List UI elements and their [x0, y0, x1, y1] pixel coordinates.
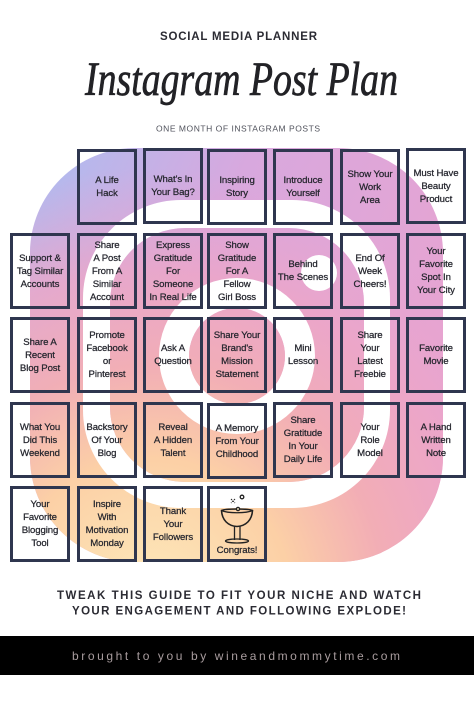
post: What's In Your Bag?: [143, 148, 203, 224]
post: Favorite Movie: Favorite: [419, 343, 453, 354]
post: End Of Week Cheers!: End Of: [355, 252, 385, 264]
post: Must Have Beauty Product: Beauty: [421, 180, 451, 192]
post: Thank Your Followers: Your: [164, 518, 182, 530]
post: Must Have Beauty Product: [406, 148, 466, 224]
post: Share Your Brand's Mission Statement: Statement: [216, 369, 258, 380]
post: Backstory Of Your Blog: Of Your: [91, 434, 123, 446]
post: Support & Tag Similar Accounts: Support &: [19, 252, 61, 264]
post: Inspiring Story: Story: [226, 188, 248, 199]
post: Support & Tag Similar Accounts: [10, 233, 70, 309]
post: A Memory From Your Childhood: Childhood: [216, 448, 258, 460]
post: Share A Post From A Similar Account: From A: [92, 266, 122, 276]
post: A Memory From Your Childhood: From Your: [215, 436, 259, 446]
post: Show Your Work Area: Area: [360, 194, 380, 206]
post: Your Favorite Spot In Your City: [406, 233, 466, 309]
post: Promote Facebook or Pinterest: Promote: [89, 330, 125, 341]
post: Backstory Of Your Blog: [77, 402, 137, 478]
footer band: [0, 636, 474, 675]
post: Share A Post From A Similar Account: [77, 233, 137, 309]
post: What's In Your Bag?: Your Bag?: [151, 187, 195, 198]
post: What You Did This Weekend: Did This: [23, 434, 57, 446]
post: Reveal A Hidden Talent: Reveal: [158, 422, 188, 432]
post: Express Gratitude For Someone In Real Life: Express: [156, 240, 190, 250]
post: Show Gratitude For A Fellow Girl Boss: Fellow: [223, 278, 251, 290]
post: Your Favorite Blogging Tool: Your: [30, 499, 49, 510]
post: Your Role Model: Role: [360, 434, 380, 446]
post: Support & Tag Similar Accounts: Accounts: [21, 278, 59, 290]
post: Show Your Work Area: Work: [359, 182, 381, 192]
post: Share A Recent Blog Post: Recent: [25, 350, 55, 360]
post: Behind The Scenes: The Scenes: [278, 272, 328, 283]
post: Share Your Latest Freebie: Latest: [357, 356, 383, 367]
post: Inspire With Motivation Monday: Monday: [90, 538, 124, 549]
post: Inspire With Motivation Monday: Inspire: [93, 499, 121, 510]
post: Your Favorite Blogging Tool: Blogging: [22, 525, 58, 536]
post: Share A Post From A Similar Account: Account: [90, 292, 124, 302]
post: Inspire With Motivation Monday: Motivation: [86, 525, 128, 536]
post: Share Gratitude In Your Daily Life: [273, 402, 333, 478]
post: Congrats!: Congrats!: [217, 545, 257, 556]
post: Promote Facebook or Pinterest: Pinterest: [89, 369, 125, 380]
post: Mini Lesson: Lesson: [288, 356, 318, 367]
post: A Memory From Your Childhood: A Memory: [216, 422, 258, 434]
post: A Hand Written Note: Note: [426, 448, 446, 458]
post: Inspire With Motivation Monday: With: [98, 512, 116, 523]
post: Share Your Brand's Mission Statement: Mission: [221, 356, 253, 367]
post: Backstory Of Your Blog: Blog: [98, 448, 116, 458]
post: Promote Facebook or Pinterest: Facebook: [86, 343, 128, 354]
call to action text: [57, 590, 421, 618]
title: Instagram Post Plan: Instagram Post Plan: [84, 53, 398, 106]
post: Reveal A Hidden Talent: [143, 402, 203, 478]
footer band: brought to you by wineandmommytime.com: [72, 649, 400, 663]
post: End Of Week Cheers!: Cheers!: [354, 278, 386, 290]
post: Share A Recent Blog Post: Blog Post: [20, 362, 60, 374]
post: Must Have Beauty Product: Must Have: [414, 168, 458, 178]
post: Share Your Brand's Mission Statement: Share Your: [214, 330, 260, 341]
post: Show Gratitude For A Fellow Girl Boss: Gratitude: [218, 252, 256, 264]
post: Show Gratitude For A Fellow Girl Boss: For A: [226, 266, 248, 276]
post: Support & Tag Similar Accounts: Tag Similar: [17, 266, 63, 276]
post: Share A Post From A Similar Account: Share: [94, 240, 120, 250]
post: What You Did This Weekend: Weekend: [20, 448, 60, 458]
post: Share A Post From A Similar Account: Similar: [93, 278, 121, 290]
heading: social media planner: SOCIAL MEDIA PLANNER: [160, 31, 318, 43]
post: Mini Lesson: Mini: [294, 343, 312, 354]
post: Thank Your Followers: Followers: [153, 532, 193, 542]
post: Mini Lesson: [273, 317, 333, 393]
post: Reveal A Hidden Talent: A Hidden: [154, 434, 192, 446]
post: Behind The Scenes: [273, 233, 333, 309]
post: Your Favorite Spot In Your City: Spot In: [421, 272, 451, 283]
post: Introduce Yourself: Introduce: [283, 175, 323, 186]
post: A Life Hack: A Life: [95, 175, 119, 186]
post: Share Gratitude In Your Daily Life: Share: [290, 415, 316, 426]
post: Share Your Latest Freebie: Your: [360, 343, 379, 354]
post: Share A Post From A Similar Account: A Post: [93, 252, 121, 264]
post: Share A Recent Blog Post: Share A: [23, 336, 57, 348]
post: Express Gratitude For Someone In Real Life: Someone: [153, 278, 193, 290]
post: Share Your Latest Freebie: Share: [357, 330, 383, 341]
post: A Memory From Your Childhood: [207, 403, 267, 479]
post: A Life Hack: [77, 149, 137, 225]
post: A Life Hack: Hack: [96, 188, 118, 199]
post: Thank Your Followers: [143, 486, 203, 562]
post: Express Gratitude For Someone In Real Life: [143, 233, 203, 309]
post: Your Role Model: [340, 402, 400, 478]
post: Your Favorite Spot In Your City: Your City: [417, 285, 455, 296]
post: A Hand Written Note: [406, 402, 466, 478]
post: Express Gratitude For Someone In Real Life: In Real Life: [149, 292, 197, 302]
post: Congrats!: [207, 486, 267, 562]
post: A Hand Written Note: Written: [421, 434, 451, 446]
post: End Of Week Cheers!: Week: [358, 266, 382, 276]
post: Show Gratitude For A Fellow Girl Boss: [207, 233, 267, 309]
post: What's In Your Bag?: What's In: [154, 174, 192, 185]
post: Share Your Brand's Mission Statement: [207, 317, 267, 393]
post: What You Did This Weekend: What You: [20, 422, 60, 432]
post: Share Your Latest Freebie: Freebie: [354, 369, 386, 380]
post: Ask A Question: Question: [154, 356, 192, 367]
post: Favorite Movie: [406, 317, 466, 393]
icon: Instagram logo: [30, 148, 443, 562]
post: Express Gratitude For Someone In Real Life: For: [166, 266, 180, 276]
post: Share Gratitude In Your Daily Life: Daily Life: [284, 454, 322, 465]
post: Behind The Scenes: Behind: [288, 259, 318, 270]
post: Share Your Latest Freebie: [340, 317, 400, 393]
post: End Of Week Cheers!: [340, 233, 400, 309]
post: Share Gratitude In Your Daily Life: In Your: [288, 441, 318, 452]
post: Must Have Beauty Product: Product: [420, 194, 452, 204]
post: Inspiring Story: [207, 149, 267, 225]
post: Your Favorite Blogging Tool: [10, 486, 70, 562]
post: Reveal A Hidden Talent: Talent: [160, 448, 185, 458]
post: Ask A Question: [143, 317, 203, 393]
post: Share Gratitude In Your Daily Life: Gratitude: [284, 428, 322, 439]
post: Your Favorite Spot In Your City: Favorite: [419, 259, 453, 270]
post: Express Gratitude For Someone In Real Life: Gratitude: [154, 252, 192, 264]
post: Backstory Of Your Blog: Backstory: [86, 422, 128, 432]
call to action text: TWEAK THIS GUIDE TO FIT YOUR NICHE AND WATCH: [57, 590, 421, 602]
post: Thank Your Followers: Thank: [160, 506, 186, 516]
post: Share Your Brand's Mission Statement: Brand's: [221, 343, 253, 354]
post: Your Role Model: Your: [360, 422, 379, 432]
post: Your Favorite Blogging Tool: Favorite: [23, 512, 57, 523]
post: Show Your Work Area: [340, 149, 400, 225]
post: Introduce Yourself: Yourself: [286, 188, 320, 199]
post: Inspire With Motivation Monday: [77, 486, 137, 562]
post: Show Your Work Area: Show Your: [348, 168, 392, 180]
post: Show Gratitude For A Fellow Girl Boss: Show: [225, 240, 249, 250]
post: Your Role Model: Model: [357, 448, 383, 458]
post: Your Favorite Blogging Tool: Tool: [31, 538, 49, 549]
post: Share A Recent Blog Post: [10, 317, 70, 393]
post: What You Did This Weekend: [10, 402, 70, 478]
post: Introduce Yourself: [273, 149, 333, 225]
subheading: one month of instagram posts: ONE MONTH OF INSTAGRAM POSTS: [156, 124, 320, 134]
call to action text: YOUR ENGAGEMENT AND FOLLOWING EXPLODE!: [72, 606, 406, 618]
post: Promote Facebook or Pinterest: [77, 317, 137, 393]
post: Your Favorite Spot In Your City: Your: [426, 246, 445, 257]
icon: champagne coupe: [220, 494, 254, 544]
post: Ask A Question: Ask A: [161, 343, 185, 354]
post: Inspiring Story: Inspiring: [219, 175, 255, 186]
post: Promote Facebook or Pinterest: or: [103, 356, 111, 367]
post: A Hand Written Note: A Hand: [421, 422, 451, 432]
post: Show Gratitude For A Fellow Girl Boss: Girl Boss: [218, 292, 256, 302]
post: Favorite Movie: Movie: [423, 356, 449, 367]
